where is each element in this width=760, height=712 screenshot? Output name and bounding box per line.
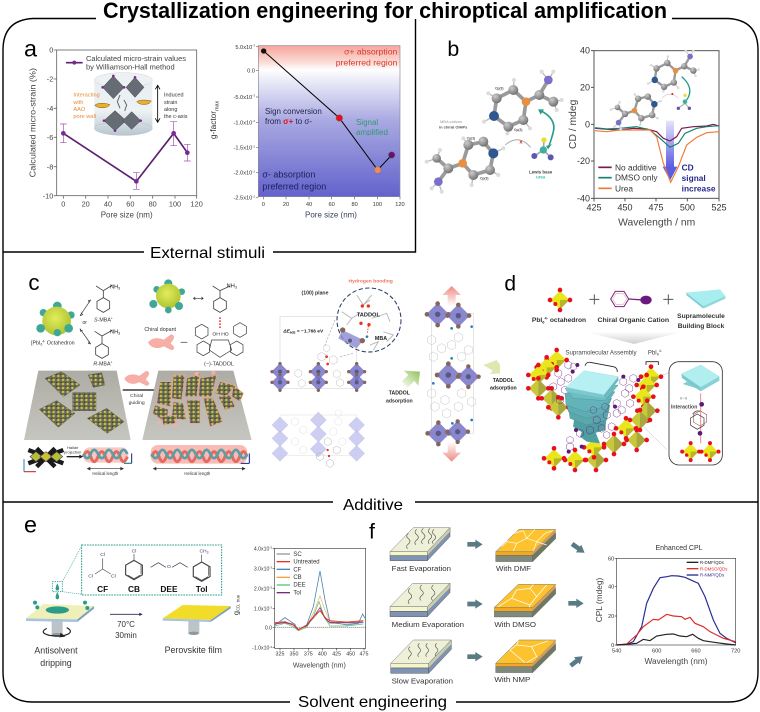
chart: g-CD spectra: 400 (318, 651, 327, 657)
chart: g-factor versus pore size: σ+ absorption (344, 46, 398, 56)
chart: micro-strain versus pore size: -6 (47, 133, 53, 142)
chart: g-factor versus pore size: preferred region (336, 58, 398, 68)
panel d (483, 273, 725, 472)
perovskite film: Perovskite film (165, 645, 222, 655)
octahedron with S- and R-MBA cations: 3 (118, 331, 120, 335)
adsorption label second line: adsorption (386, 398, 413, 404)
slow evaporation film (391, 640, 453, 685)
chart: enhanced CPL spectra: 600 (652, 649, 661, 655)
supramolecular assembly (526, 348, 670, 472)
film with DMF small grains: With DMF (496, 564, 531, 573)
chart: g-factor versus pore size: 60 (329, 202, 335, 208)
chart: circular dichroism spectra: 475 (648, 202, 663, 212)
octahedron with S- and R-MBA cations: R-MBA (93, 361, 111, 367)
chart: micro-strain versus pore size: -10 (43, 191, 53, 200)
panel f (369, 519, 740, 685)
building blocks legend: 4- (544, 315, 549, 320)
perovskite film (163, 605, 231, 655)
annealing arrow: 70°C (117, 620, 135, 629)
chart: g-CD spectra: 0.0 (265, 625, 272, 631)
chart: enhanced CPL spectra: Enhanced CPL (656, 545, 703, 552)
inset: cylindrical AAO pore with perovskite: strain (164, 100, 177, 106)
chart: circular dichroism spectra: 450 (617, 202, 632, 212)
chiral dopant TADDOL with MBA: 3 (235, 285, 237, 289)
chart: circular dichroism spectra: No additive (615, 162, 657, 172)
chart: g-factor versus pore size: 120 (395, 202, 405, 208)
(100) plane structure with hydrogen bonding callout: ΔE (282, 329, 291, 335)
long helix: Helical length (184, 471, 211, 476)
chart: g-CD spectra: 350 (290, 651, 298, 657)
panel letter a: a (24, 36, 37, 62)
chart: micro-strain versus pore size: Calculated micro-strain values (86, 56, 187, 63)
building blocks legend (532, 288, 725, 344)
chart: g-CD spectra (231, 546, 368, 670)
antisolvent molecules callout: Cl (88, 573, 93, 579)
chart: g-factor versus pore size: -3 (252, 94, 255, 98)
chart: micro-strain versus pore size: 80 (149, 200, 157, 209)
panel letter d: d (504, 273, 516, 296)
chart: g-CD spectra: CF (293, 567, 302, 573)
chart: micro-strain versus pore size: 40 (104, 200, 112, 209)
TADDOL adsorption lattice with strain arrows (425, 286, 481, 462)
chart: micro-strain versus pore size: -2 (47, 75, 53, 84)
antisolvent molecules callout (52, 545, 222, 595)
chart: g-factor versus pore size: 5.0x10 (235, 45, 252, 51)
chart: g-CD spectra: 325 (276, 651, 284, 657)
chart: g-factor versus pore size: σ- absorption (262, 170, 315, 180)
octahedron with S- and R-MBA cations: or (82, 320, 87, 326)
chart: g-CD spectra: SC (293, 552, 302, 558)
panel letter c: c (28, 270, 40, 295)
(100) plane structure with hydrogen bonding callout: = −1.766 eV (296, 329, 324, 335)
panel letter e: e (24, 512, 37, 538)
chart: g-CD spectra: 475 (360, 651, 368, 657)
chart: enhanced CPL spectra: 720 (731, 649, 740, 655)
(100) plane structure with hydrogen bonding callout: (100) plane (302, 290, 329, 296)
chart: enhanced CPL spectra: 540 (612, 649, 621, 655)
medium evaporation film: Medium Evaporation (392, 620, 464, 629)
antisolvent molecules callout: CB (128, 584, 140, 594)
chart: g-factor versus pore size: Pore size (nm) (305, 210, 357, 219)
spin coating substrate with droplets: dripping (40, 658, 72, 668)
chart: g-CD spectra: Untreated (293, 559, 320, 565)
inset: pi-pi interaction (669, 362, 722, 465)
chart: g-factor versus pore size: -1.0x10 (233, 120, 252, 126)
building blocks legend: Building Block (678, 323, 725, 330)
chart: g-CD spectra: -3 (269, 566, 272, 570)
chart: g-factor versus pore size: 40 (306, 202, 312, 208)
chart: g-factor versus pore size: -2.0x10 (233, 171, 252, 177)
chart: circular dichroism spectra: 0 (585, 119, 590, 129)
supramolecular assembly: 6 (657, 352, 659, 356)
chiral dopant TADDOL with MBA: (−)-TADDOL (204, 362, 234, 368)
chart: circular dichroism spectra: -20 (577, 156, 590, 166)
chart: micro-strain versus pore size: 120 (191, 200, 203, 209)
chart: g-factor versus pore size: 20 (283, 202, 289, 208)
chart: g-CD spectra: 425 (332, 651, 341, 657)
perovskite nanocrystals on substrate (24, 371, 131, 440)
molecular structure: MBA cations and urea: MBA cations (440, 119, 462, 124)
chart: circular dichroism spectra: signal (682, 173, 706, 183)
panel b (425, 37, 726, 229)
chart: g-factor versus pore size: -1.5x10 (233, 146, 252, 152)
halide projection with short helix: Helical length (92, 471, 119, 476)
chart: g-CD spectra: 375 (304, 651, 313, 657)
annealing arrow: 30min (115, 631, 137, 640)
octahedron with S- and R-MBA cations: 6 (40, 343, 42, 347)
antisolvent molecules callout: DEE (160, 584, 178, 594)
chart: g-factor versus pore size: 80 (352, 202, 358, 208)
chart: g-factor versus pore size: -2.5x10 (233, 196, 252, 202)
chart: enhanced CPL spectra: R-NMP/QDs (700, 573, 724, 578)
chart: g-CD spectra: -3 (269, 586, 272, 590)
antisolvent molecules callout: Cl (132, 548, 136, 554)
antisolvent molecules callout: CH (199, 548, 207, 554)
chiral dopant TADDOL with MBA: NH (227, 283, 235, 289)
molecular structure: MBA cations and urea: urea (536, 175, 546, 180)
process arrows (467, 540, 483, 661)
chart: g-CD spectra: CD, true (236, 594, 241, 611)
long helix (151, 445, 249, 476)
(100) plane structure with hydrogen bonding callout: MBA (375, 336, 387, 342)
chiral guiding arrow with dopant: Chiral (130, 393, 143, 399)
chart: g-factor versus pore size: from σ+ to σ- (265, 117, 312, 126)
chart: circular dichroism spectra: CD (682, 162, 694, 172)
building blocks legend: Supramolecule (677, 313, 725, 320)
chart: circular dichroism spectra (568, 46, 726, 229)
chart: g-CD spectra: DEE (293, 583, 306, 589)
antisolvent molecules callout: CF (97, 584, 108, 594)
chart: enhanced CPL spectra (594, 545, 740, 666)
building blocks legend: PbI (532, 317, 542, 324)
chart: g-CD spectra: 450 (346, 651, 355, 657)
chart: g-CD spectra: -3 (269, 606, 272, 610)
chart: enhanced CPL spectra: Wavelength (nm) (644, 656, 708, 666)
chiral dopant TADDOL with MBA (144, 279, 246, 368)
inset: cylindrical AAO pore with perovskite: AAO (73, 107, 86, 113)
chart: g-CD spectra: Wavelength (nm) (293, 663, 346, 670)
(100) plane structure with hydrogen bonding callout (270, 279, 401, 392)
panel e (24, 512, 368, 670)
chart: micro-strain versus pore size: Calculated micro-strain (%) (28, 68, 38, 177)
panel a (24, 36, 405, 219)
spin coating substrate with droplets (26, 592, 94, 668)
TADDOL adsorption label left: TADDOL (389, 390, 410, 396)
chart: g-CD spectra: -3 (269, 645, 272, 649)
panel letter b: b (447, 37, 459, 61)
chart: g-CD spectra: Tol (293, 590, 301, 596)
film with DMF small grains (496, 529, 556, 573)
chart: enhanced CPL spectra: 660 (691, 649, 701, 655)
halide projection with short helix (24, 445, 132, 476)
chiral guiding arrow with dopant: guiding (129, 400, 145, 406)
chart: g-factor versus pore size: max (214, 101, 220, 111)
heading: solvent engineering: Solvent engineering (298, 694, 447, 711)
molecular structure: MBA cations and urea: in chiral OIHPs (439, 125, 468, 130)
octahedron with S- and R-MBA cations: S-MBA (94, 317, 111, 323)
chart: g-CD spectra: -3 (269, 546, 272, 550)
inset: pi-pi interaction: Interaction (671, 405, 697, 411)
chiral dopant TADDOL with MBA: OH HO (212, 331, 229, 337)
supramolecular assembly: Supramolecular Assembly (565, 349, 638, 356)
chart: circular dichroism spectra: 525 (711, 202, 726, 212)
heading: external stimuli: External stimuli (150, 245, 265, 262)
chart: g-CD spectra: 3.0x10 (254, 566, 269, 572)
film with DMSO medium grains (494, 584, 556, 629)
chart: enhanced CPL spectra: 60 (608, 556, 614, 562)
building blocks legend: 6 (542, 320, 545, 325)
antisolvent molecules callout: O (167, 564, 171, 570)
chart: g-factor versus pore size: -2 (252, 119, 255, 123)
building blocks legend: octahedron (548, 317, 586, 324)
arrows to enhanced CPL (568, 540, 587, 669)
chart: micro-strain versus pore size: 100 (169, 200, 181, 209)
spin coating substrate with droplets: Antisolvent (34, 646, 78, 656)
(100) plane structure with hydrogen bonding callout: Hydrogen bonding (349, 279, 393, 285)
inset: cylindrical AAO pore with perovskite: Induced (164, 93, 184, 99)
chart: circular dichroism spectra: CD / mdeg (568, 99, 579, 149)
chart: g-factor versus pore size: -5.0x10 (233, 95, 252, 101)
inset: cylindrical AAO pore with perovskite (72, 73, 188, 136)
chiral dopant TADDOL with MBA: Chiral dopant (144, 327, 177, 333)
octahedron with S- and R-MBA cations (31, 285, 120, 367)
chart: micro-strain versus pore size: 20 (82, 200, 90, 209)
fast evaporation film (390, 528, 451, 573)
octahedron with S- and R-MBA cations: 3 (118, 287, 120, 291)
chart: circular dichroism spectra: 40 (580, 46, 590, 56)
chart: circular dichroism spectra: -40 (577, 193, 590, 203)
chart: micro-strain versus pore size: 0 (61, 200, 65, 209)
fast evaporation film: Fast Evaporation (392, 564, 451, 573)
faded side-view structure (272, 410, 365, 467)
chart: enhanced CPL spectra: 40 (608, 585, 614, 591)
chiral guiding arrow with dopant (123, 371, 160, 406)
chart: circular dichroism spectra: DMSO only (615, 173, 658, 183)
chart: micro-strain versus pore size: by Williamson-Hall method (86, 65, 175, 72)
chart: g-factor versus pore size: -2 (252, 144, 255, 148)
chart: micro-strain versus pore size (28, 46, 203, 219)
molecular structure: MBA cations and urea: Cp(3) (514, 128, 523, 132)
chart: g-factor versus pore size: Sign conversion (265, 107, 322, 116)
chart: enhanced CPL spectra: 20 (608, 614, 614, 620)
chart: g-CD spectra: 2.0x10 (254, 586, 269, 592)
octahedron with S- and R-MBA cations: Octahedron (45, 340, 75, 346)
chart: g-factor versus pore size: amplified (356, 128, 388, 137)
chart: enhanced CPL spectra: R-DMF/QDs (700, 560, 724, 565)
inset: pi-pi interaction: π−π (680, 397, 688, 401)
chart: enhanced CPL spectra: R-DMSO/QDs (700, 566, 727, 571)
chiral-guided helical assemblies on substrate (142, 371, 252, 440)
chart: g-factor versus pore size: -2 (252, 194, 255, 198)
annealing arrow (110, 613, 143, 640)
octahedron with S- and R-MBA cations: + (111, 316, 113, 320)
chart: g-factor versus pore size: g-factor (208, 111, 218, 139)
antisolvent molecules callout: 3 (207, 550, 209, 554)
octahedron with S- and R-MBA cations: NH (110, 285, 118, 291)
heading: additive: Additive (343, 497, 403, 514)
chart: micro-strain versus pore size: 60 (126, 200, 134, 209)
supramolecular assembly: PbI (648, 350, 657, 356)
green TADDOL adsorption arrow right (483, 360, 500, 374)
chart: g-factor versus pore size: -3 (252, 44, 255, 48)
chart: g-CD spectra: 4.0x10 (254, 546, 269, 552)
inset: cylindrical AAO pore with perovskite: along (164, 107, 177, 113)
chart: g-factor versus pore size: 0 (262, 202, 265, 208)
chart: enhanced CPL spectra: CPL (mdeg) (594, 577, 604, 622)
antisolvent molecules callout: Cl (100, 552, 105, 558)
chart: circular dichroism spectra: 20 (580, 82, 590, 92)
chart: g-CD spectra: 1.0x10 (254, 606, 269, 612)
chart: g-factor versus pore size: Signal (356, 118, 378, 127)
supramolecular assembly: 4- (659, 349, 663, 353)
halide projection with short helix: projection (64, 449, 81, 454)
building blocks legend: Chiral Organic Cation (597, 317, 669, 324)
panel c: adsorption structures (270, 279, 481, 467)
TADDOL adsorption label right: TADDOL (493, 378, 514, 384)
green TADDOL adsorption arrow left (402, 371, 420, 387)
chart: circular dichroism spectra: 500 (680, 202, 695, 212)
chart: micro-strain versus pore size: -4 (47, 104, 53, 113)
chart: g-factor versus pore size: preferred region (262, 181, 326, 191)
medium evaporation film (390, 583, 464, 629)
chart: g-factor versus pore size: -2 (252, 169, 255, 173)
chart: g-CD spectra: -1.0x10 (252, 646, 269, 652)
inset: cylindrical AAO pore with perovskite: pore wall (73, 114, 96, 120)
chart: g-factor versus pore size: 100 (373, 202, 382, 208)
panel c: scheme (24, 270, 252, 476)
molecular structure: MBA cations and urea: x (519, 139, 523, 145)
chart: circular dichroism spectra: 425 (586, 202, 601, 212)
octahedron with S- and R-MBA cations: + (111, 360, 113, 364)
molecular structure: MBA cations and urea (425, 70, 564, 194)
chart: circular dichroism spectra: increase (682, 183, 716, 193)
chart: micro-strain versus pore size: Pore size (nm) (101, 210, 153, 219)
molecular structure: MBA cations and urea: Cp(3) (467, 136, 475, 140)
chart: enhanced CPL spectra: 0 (611, 643, 614, 649)
film with DMSO medium grains: With DMSO (494, 620, 536, 629)
octahedron with S- and R-MBA cations: 4- (42, 339, 45, 343)
slow evaporation film: Slow Evaporation (392, 676, 453, 685)
chart: micro-strain versus pore size: 0 (49, 46, 53, 55)
(100) plane structure with hydrogen bonding callout: ads (290, 331, 296, 335)
antisolvent molecules callout: Tol (196, 584, 208, 594)
molecular structure: MBA cations and urea: Lewis base (529, 169, 553, 174)
panel letter f: f (369, 519, 375, 543)
film with NMP large grains (494, 640, 556, 684)
inset: cylindrical AAO pore with perovskite: the c-axis (164, 114, 188, 120)
chart: micro-strain versus pore size: -8 (47, 162, 53, 171)
chart: circular dichroism spectra: Urea (615, 183, 633, 193)
chart: g-factor versus pore size: 0.0 (247, 69, 255, 75)
halide projection with short helix: Halide (67, 445, 79, 450)
octahedron with S- and R-MBA cations: [PbI (31, 340, 40, 346)
chart: g-CD spectra: g (231, 611, 240, 615)
octahedron with S- and R-MBA cations: NH (110, 329, 118, 335)
chart: circular dichroism spectra: Wavelength / nm (618, 218, 695, 229)
adsorption label right second line: adsorption (490, 386, 517, 392)
antisolvent molecules callout: Cl (111, 573, 116, 579)
molecular structure: MBA cations and urea: Cp(3) (480, 176, 489, 180)
inset: cylindrical AAO pore with perovskite: with (72, 100, 83, 106)
(100) plane structure with hydrogen bonding callout: TADDOL (357, 313, 380, 319)
chart: g-CD spectra: CB (293, 575, 302, 581)
inset: cylindrical AAO pore with perovskite: Interacting (73, 93, 100, 99)
chart: g-factor versus pore size (208, 44, 405, 219)
molecular structure: MBA cations and urea: Cp(3) (495, 86, 504, 90)
film with NMP large grains: With NMP (494, 675, 530, 684)
